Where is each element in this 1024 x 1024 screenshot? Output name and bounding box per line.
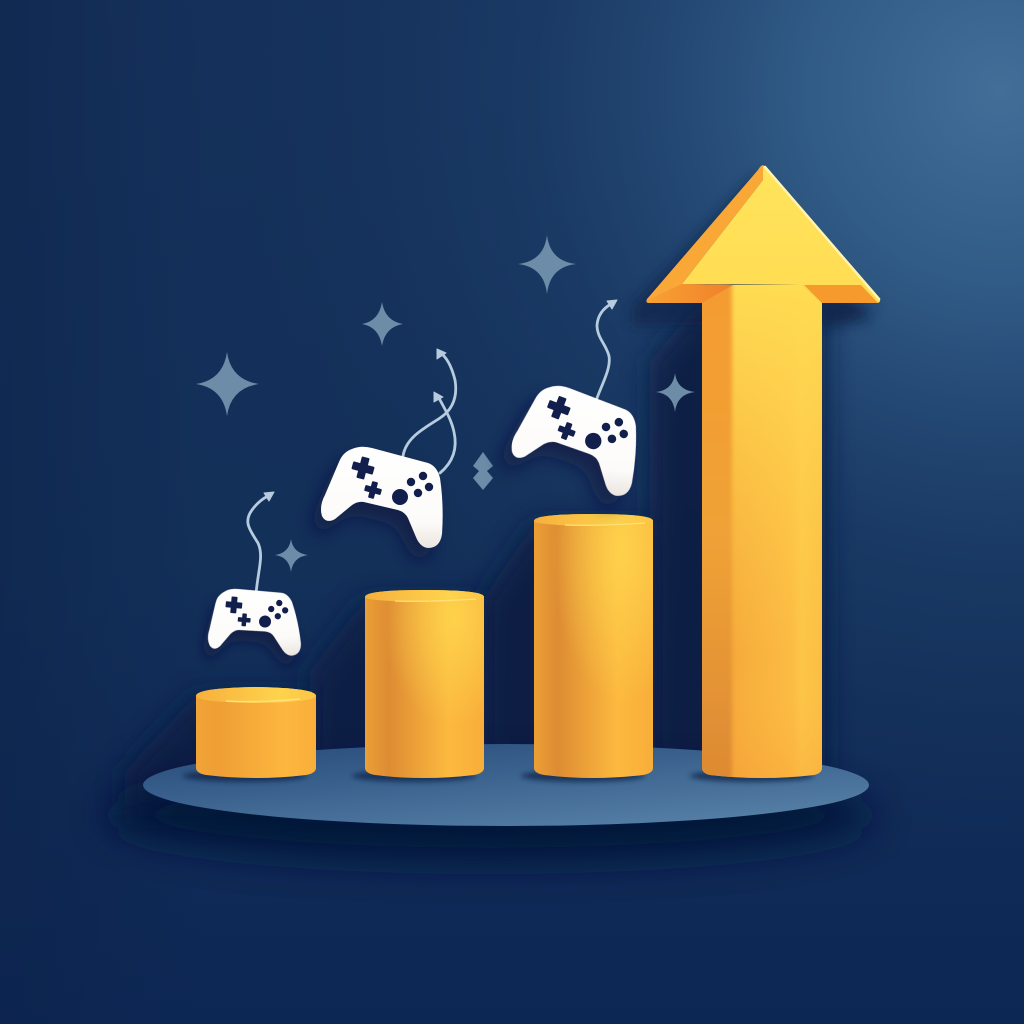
bar 3: tall cylinder (534, 514, 653, 778)
controller 1 (200, 579, 303, 669)
trail 2a (403, 349, 456, 456)
platform disc (143, 744, 869, 826)
sparkle small lower (275, 539, 308, 572)
trail 2b (434, 392, 455, 473)
big upward arrow (646, 165, 880, 783)
bar 1: short cylinder (196, 687, 316, 778)
controller 2 (321, 447, 443, 548)
trail arrows (248, 300, 617, 594)
sparkles (196, 235, 695, 572)
sparkle large left (196, 352, 259, 416)
bar 2: medium cylinder (365, 590, 484, 778)
shadow under platform (105, 769, 875, 861)
sparkle top right (518, 235, 576, 294)
sparkle beside arrow (656, 373, 695, 412)
controller 3 (508, 382, 642, 497)
double diamond sparkle (473, 452, 493, 490)
trail 1 (248, 492, 274, 594)
trail 3 (597, 300, 617, 398)
sparkle top middle (362, 302, 403, 346)
contact shadows on platform (183, 770, 814, 782)
arrow head (646, 165, 880, 303)
wall shadows behind bars and arrow (125, 174, 880, 815)
arrow shaft (698, 283, 822, 783)
